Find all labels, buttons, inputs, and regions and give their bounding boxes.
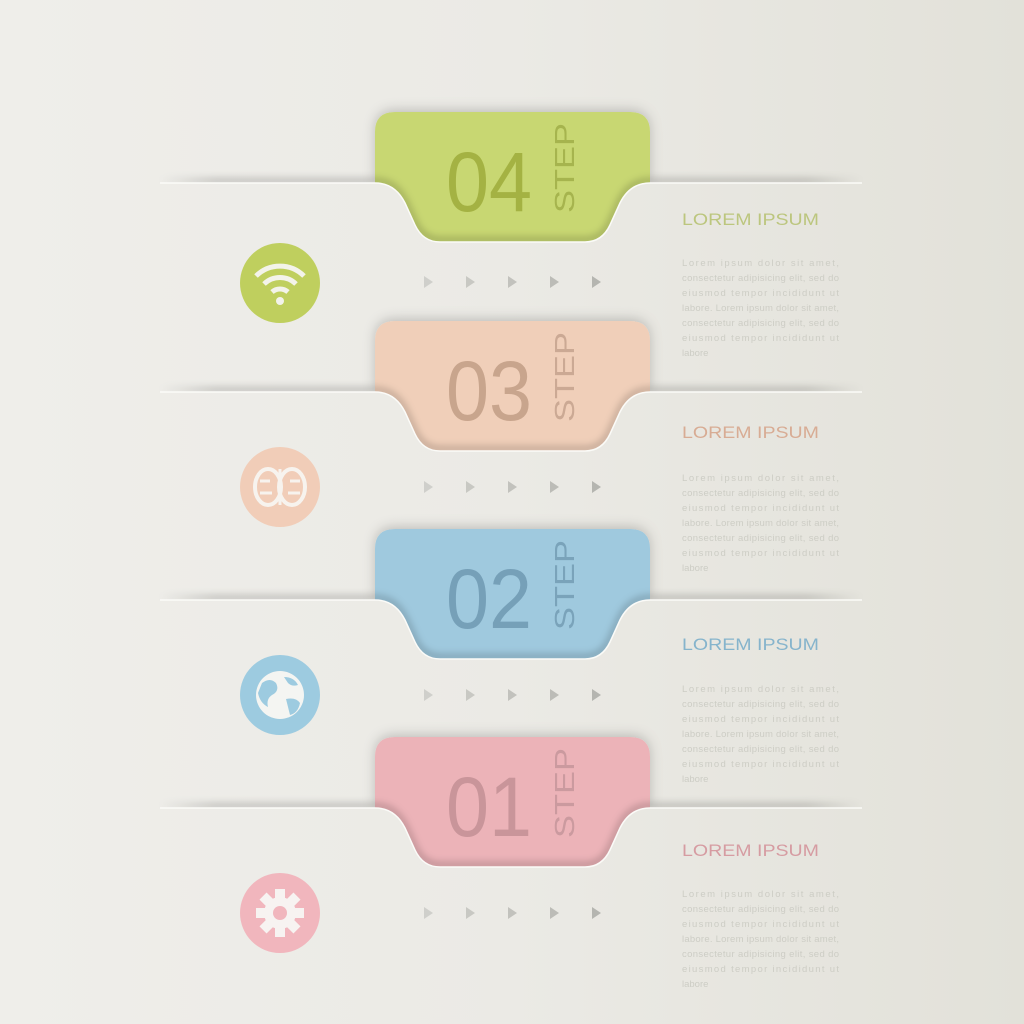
tab 04 xyxy=(375,112,650,242)
tab 03: 03 xyxy=(446,344,532,438)
body text xyxy=(682,889,839,990)
tab 02: 02 xyxy=(446,552,532,646)
step 02 xyxy=(150,529,875,808)
body text: eiusmod tempor incididunt ut xyxy=(682,288,839,299)
body text: labore. Lorem ipsum dolor sit amet, xyxy=(682,729,839,740)
icon: gear xyxy=(240,873,320,953)
body text: Lorem ipsum dolor sit amet, xyxy=(682,473,839,484)
tab 04: 04 xyxy=(446,135,532,229)
sheet 01 xyxy=(150,806,875,1024)
arrows xyxy=(424,276,601,288)
arrows xyxy=(424,907,601,919)
tab 03 xyxy=(375,321,650,451)
body text: labore xyxy=(682,979,708,990)
body text: eiusmod tempor incididunt ut xyxy=(682,503,839,514)
tab 02: STEP xyxy=(549,540,580,630)
heading: LOREM IPSUM xyxy=(682,423,819,442)
icon: globe xyxy=(240,655,320,735)
sheet 02 xyxy=(150,598,875,808)
body text: consectetur adipisicing elit, sed do xyxy=(682,904,839,915)
body text: labore xyxy=(682,774,708,785)
body text: Lorem ipsum dolor sit amet, xyxy=(682,889,839,900)
step 04 xyxy=(150,112,875,392)
body text xyxy=(682,684,839,785)
heading: LOREM IPSUM xyxy=(682,841,819,860)
heading: LOREM IPSUM xyxy=(682,635,819,654)
heading: LOREM IPSUM xyxy=(682,210,819,229)
sheet 03 xyxy=(150,390,875,600)
body text: labore. Lorem ipsum dolor sit amet, xyxy=(682,518,839,529)
icon: wifi xyxy=(240,243,320,323)
body text: eiusmod tempor incididunt ut xyxy=(682,919,839,930)
body text: consectetur adipisicing elit, sed do xyxy=(682,488,839,499)
body text: consectetur adipisicing elit, sed do xyxy=(682,533,839,544)
arrows xyxy=(424,481,601,493)
body text: eiusmod tempor incididunt ut xyxy=(682,714,839,725)
body text: eiusmod tempor incididunt ut xyxy=(682,759,839,770)
arrows xyxy=(424,689,601,701)
body text: labore xyxy=(682,348,708,359)
sheet 04 xyxy=(150,181,875,392)
body text: eiusmod tempor incididunt ut xyxy=(682,548,839,559)
tab 02 xyxy=(375,529,650,659)
body text: Lorem ipsum dolor sit amet, xyxy=(682,258,839,269)
body text: consectetur adipisicing elit, sed do xyxy=(682,699,839,710)
body text: consectetur adipisicing elit, sed do xyxy=(682,949,839,960)
step 01 xyxy=(150,737,875,1024)
body text: labore xyxy=(682,563,708,574)
icon: brain xyxy=(240,447,320,527)
tab 03: STEP xyxy=(549,332,580,422)
body text xyxy=(682,473,839,574)
body text: consectetur adipisicing elit, sed do xyxy=(682,744,839,755)
tab 01: 01 xyxy=(446,760,532,854)
body text: labore. Lorem ipsum dolor sit amet, xyxy=(682,303,839,314)
body text xyxy=(682,258,839,359)
tab 01: STEP xyxy=(549,748,580,838)
body text: Lorem ipsum dolor sit amet, xyxy=(682,684,839,695)
body text: consectetur adipisicing elit, sed do xyxy=(682,273,839,284)
step 03 xyxy=(150,321,875,600)
body text: eiusmod tempor incididunt ut xyxy=(682,964,839,975)
tab 01 xyxy=(375,737,650,867)
body text: consectetur adipisicing elit, sed do xyxy=(682,318,839,329)
body text: eiusmod tempor incididunt ut xyxy=(682,333,839,344)
tab 04: STEP xyxy=(549,123,580,213)
body text: labore. Lorem ipsum dolor sit amet, xyxy=(682,934,839,945)
